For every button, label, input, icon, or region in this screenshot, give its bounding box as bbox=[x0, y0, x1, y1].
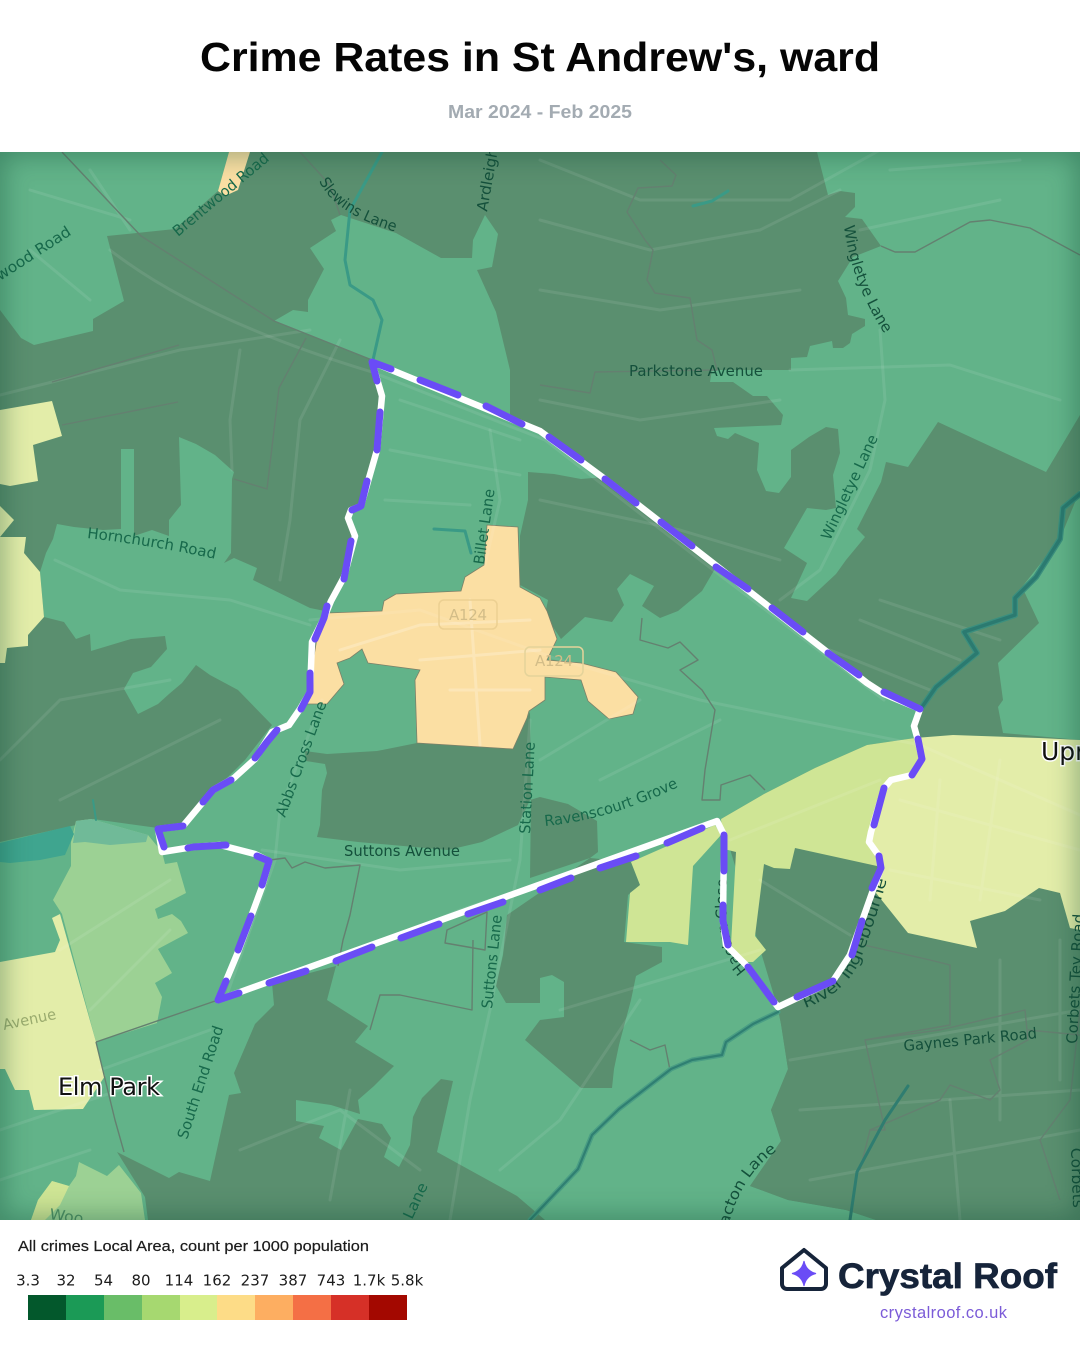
region: yellow-green south of ward line bbox=[626, 825, 721, 945]
road label: Wingletye Lane south: Wingletye Lane bbox=[817, 432, 882, 543]
place label: Elm Park: Elm Park bbox=[58, 1073, 160, 1101]
legend values: 5.8k bbox=[391, 1272, 424, 1290]
region: Upminster pale yellow bbox=[869, 735, 1080, 948]
brand url: crystalroof.co.uk bbox=[880, 1304, 1008, 1322]
road label: Abbs Cross Lane: Abbs Cross Lane bbox=[272, 699, 330, 819]
region: Elm Park green-yellow bbox=[53, 819, 188, 1042]
road label: Hornchurch Road: Hornchurch Road bbox=[88, 527, 216, 558]
region: bottom-left light block bbox=[31, 1162, 145, 1220]
road label: Billet Lane: Billet Lane bbox=[470, 488, 499, 566]
region: pale yellow left edge blocks bbox=[0, 401, 62, 663]
water: lake and streams bbox=[0, 152, 1080, 1220]
road label: Gaynes Park Road: Gaynes Park Road bbox=[903, 1024, 1038, 1055]
region: north-west light green bbox=[0, 152, 229, 345]
brand logo bbox=[780, 1248, 1058, 1322]
road badge: A124 west: A124 bbox=[449, 606, 487, 624]
brand name: Crystal Roof bbox=[838, 1257, 1057, 1296]
road badge: A124 west bbox=[439, 600, 497, 629]
region: dark block between ward line and town centre bbox=[520, 472, 716, 639]
legend values: 162 bbox=[203, 1272, 231, 1290]
legend values: 32 bbox=[56, 1272, 76, 1290]
road label: South End Road: South End Road bbox=[174, 1023, 227, 1141]
legend values: 1.7k bbox=[353, 1272, 386, 1290]
region: Elm Park pale yellow bbox=[0, 914, 105, 1110]
icon: house with star bbox=[782, 1250, 826, 1289]
region: bottom-left yellow-green block bbox=[31, 1181, 69, 1220]
legend values: 387 bbox=[279, 1272, 307, 1290]
map edge vignette bbox=[0, 152, 1080, 1220]
region: dark south centre bbox=[117, 966, 545, 1220]
legend title: All crimes Local Area, count per 1000 population bbox=[18, 1238, 369, 1255]
road label: Parkstone Avenue: Parkstone Avenue bbox=[629, 362, 763, 380]
road label: Ravenscourt Grove: Ravenscourt Grove bbox=[545, 780, 678, 826]
road label: Wingletye Lane north: Wingletye Lane bbox=[844, 224, 890, 332]
region: yellow-green east of ward corner bbox=[721, 738, 922, 962]
legend colour scale bbox=[28, 1295, 407, 1320]
legend values: 237 bbox=[241, 1272, 269, 1290]
region: central and southern light green bbox=[0, 215, 920, 1220]
legend values: 80 bbox=[131, 1272, 151, 1290]
legend values: 54 bbox=[94, 1272, 113, 1290]
region: dark block south of ward corner bbox=[305, 712, 662, 1088]
legend values: 114 bbox=[165, 1272, 193, 1290]
title: Crime Rates in St Andrew's, ward bbox=[200, 34, 880, 80]
region: east light green bbox=[998, 490, 1080, 740]
legend values: 3.3 bbox=[16, 1272, 40, 1290]
region: dark south east bbox=[750, 888, 1080, 1220]
road label: Slewins Lane: Slewins Lane bbox=[320, 177, 396, 231]
road label: Station Lane: Station Lane bbox=[516, 741, 539, 834]
legend values bbox=[16, 1272, 424, 1290]
road label: Avenue: Avenue bbox=[1, 1005, 58, 1034]
region: Elm Park top wash bbox=[73, 819, 148, 845]
road label: Suttons Lane: Suttons Lane bbox=[478, 914, 506, 1009]
legend bbox=[16, 1238, 424, 1320]
region: small peach sliver at top bbox=[218, 152, 250, 196]
road label: Hacton Close: Hacton Close bbox=[714, 880, 746, 976]
map panel bbox=[0, 152, 1080, 1220]
road badge: A124 east: A124 bbox=[535, 652, 573, 670]
legend values: 743 bbox=[317, 1272, 345, 1290]
subtitle: date range: Mar 2024 - Feb 2025 bbox=[448, 102, 632, 122]
region: high crime peach town centre bbox=[306, 525, 638, 749]
road network bbox=[0, 150, 1080, 1220]
ward and borough boundary lines bbox=[52, 152, 1080, 1200]
road badge: A124 east bbox=[525, 647, 583, 676]
road label: River Ingrebourne: River Ingrebourne bbox=[803, 879, 886, 1008]
region: north-east light green bbox=[710, 152, 1080, 601]
road label: Suttons Avenue: Suttons Avenue bbox=[344, 842, 460, 860]
ward boundary: St Andrew's dashed outline bbox=[158, 362, 922, 1007]
map base: low crime dark green areas bbox=[0, 152, 1080, 1220]
